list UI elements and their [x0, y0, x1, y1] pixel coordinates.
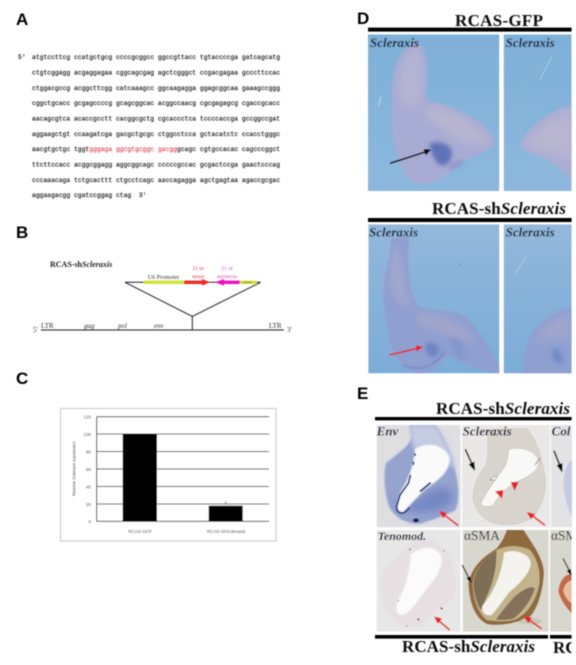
genome labels: 3': [287, 326, 292, 334]
photo label: Scleraxis: [463, 424, 512, 439]
arrow: black: [462, 565, 471, 583]
genome labels: LTR: [269, 322, 282, 330]
bottom heading RCAS-shScleraxis: RCAS-shScleraxis: [402, 637, 535, 656]
x axis labels: RCAS-GFP: [128, 529, 152, 534]
bottom rule: [375, 635, 572, 639]
sequence text: 5': [18, 54, 26, 61]
vector backbone and insert lines: [41, 282, 284, 330]
panel D: RCAS-shScleraxis whole mounts: [368, 199, 572, 373]
U6 promoter segment: [144, 281, 184, 284]
panel D: RCAS-GFP whole mounts: [357, 9, 572, 191]
photo: Scleraxis contralateral limb: [504, 34, 572, 191]
arrowhead: black: [424, 149, 431, 155]
y axis tick labels: 120: [83, 415, 91, 420]
rule: [375, 417, 572, 420]
section: Scleraxis: [462, 425, 550, 527]
panel letter C: C: [16, 369, 28, 388]
chart frame: [60, 408, 276, 541]
sequence text: atgtccttcg ccatgctgcg ccccgcggcc ggccgttacc tgtaccccga gatcagcatg: [32, 54, 280, 61]
panel E: sections: [357, 384, 576, 657]
photo label: Env: [376, 423, 399, 438]
section: alphaSMA: [463, 529, 549, 632]
y axis tick labels: 20: [86, 502, 91, 507]
photo label: Scleraxis: [370, 35, 419, 50]
genome labels: 5': [33, 326, 38, 334]
label: 21 nt sense: sense: [192, 274, 205, 280]
photo label: αSMA: [464, 528, 500, 543]
arrow: red: [389, 349, 417, 355]
terminator segment: [240, 281, 256, 284]
y axis tick labels: 60: [86, 467, 91, 472]
sequence text: aggaagctgt ccaagatcga gacgctgcgc ctggcctcca gctacatctc ccacctgggc: [32, 131, 280, 138]
arrow: 21 nt sense: [184, 279, 210, 286]
arrow: black: [465, 449, 475, 471]
genome labels: gag: [84, 322, 95, 330]
photo: Scleraxis limb with control stain: [368, 34, 499, 191]
arrow: 21 nt antisense: [215, 279, 240, 286]
y axis tick labels: 40: [86, 484, 91, 489]
rule: [368, 28, 572, 32]
construct title: RCAS-shScleraxis: [50, 260, 112, 269]
panel letter E: E: [357, 384, 368, 403]
section: Tenomod: [377, 530, 461, 632]
arrow: black: [390, 152, 425, 163]
genome labels: pol: [117, 322, 127, 330]
y axis tick labels: 100: [83, 432, 91, 437]
label: 21 nt antisense: 21 nt: [221, 266, 233, 272]
section: alphaSMA partial: [550, 530, 572, 632]
sequence text: aacagcgtca acaccgcctt cacggcgctg cgcaccctca tccccaccga gccggccgat: [32, 115, 280, 122]
arrow: black: [554, 451, 562, 473]
heading RCAS-GFP: RCAS-GFP: [455, 11, 543, 30]
y axis tick labels: 0: [88, 519, 91, 524]
panel letter A: A: [16, 10, 28, 29]
white right margin: [572, 0, 576, 665]
photo label: Tenomod.: [378, 529, 426, 543]
sequence text: aggaagacgg cgatccggag ctag 3': [32, 192, 146, 199]
section: Col partial: [551, 425, 572, 527]
genome labels: LTR: [41, 322, 54, 330]
sequence text: [18, 54, 280, 199]
sequence text: cccaaacaga tctgcacttt ctgcctcagc aaccagagga agctgagtaa agaccgcgac: [32, 177, 280, 184]
panel letter D: D: [357, 9, 369, 28]
arrow: red: [434, 616, 450, 630]
sequence text: ctggacgccg acggcttcgg catcaaagcc ggcaagagga ggagcggcaa gaaagccggg: [32, 85, 280, 92]
arrow: red: [527, 512, 545, 525]
arrowhead: red: [511, 482, 519, 491]
y axis tick labels: 80: [86, 450, 91, 454]
photo: Scleraxis limb with knockdown: [368, 224, 499, 373]
heading RCAS-shScleraxis: RCAS-shScleraxis: [436, 399, 570, 418]
x axis labels: [128, 529, 246, 534]
x axis labels: RCAS-ShScleraxis: [207, 529, 246, 534]
panel C: bar chart: [16, 369, 276, 541]
genome labels: env: [154, 322, 165, 330]
arrow: red: [439, 511, 458, 526]
photo: Scleraxis contralateral limb knockdown: [504, 224, 572, 373]
photo label: Scleraxis: [506, 35, 555, 50]
y axis tick labels: [83, 415, 91, 524]
sequence text: ctgtcggagg acgaggagaa cggcagcgag agctcgggct ccgacgagaa gcccttccac: [32, 69, 280, 76]
bar: RCAS-ShScleraxis: [209, 502, 243, 521]
heading RCAS-shScleraxis: RCAS-shScleraxis: [432, 199, 566, 218]
sequence text: aacgtgctgc tggtgggaga ggcgtgcggc gacgggcagc cgtgccacac cagcccggct: [32, 146, 280, 153]
arrow: black: [563, 558, 572, 576]
sequence text: cggctgcacc gcgagccccg gcagcggcac acggccaacg cgcgagagcg cgaccgcacc: [32, 100, 280, 107]
sequence text: ttcttccacc acggcggagg aggcggcagc cccccgccac gcgactccga gaactcccag: [32, 161, 280, 168]
genome labels: [33, 322, 292, 334]
photo label: Scleraxis: [506, 225, 555, 240]
panel letter B: B: [16, 223, 28, 242]
rule: [368, 218, 572, 222]
photo label: Scleraxis: [369, 225, 418, 240]
arrowhead: red: [416, 345, 423, 352]
y axis title: Relative Scleraxis expression: [72, 441, 76, 496]
section: Env: [377, 425, 461, 527]
U6 promoter label: U6 Promoter: [148, 275, 179, 281]
photo label: Col: [552, 424, 571, 439]
bar: RCAS-GFP: [123, 434, 157, 521]
arrowhead: red: [495, 490, 503, 499]
label: 21 nt antisense: antisense: [217, 274, 238, 280]
panel A: nucleotide sequence: [16, 10, 280, 199]
arrow: red: [524, 616, 542, 629]
panel B: vector diagram: [16, 223, 292, 334]
label: 21 nt sense: 21 nt: [192, 266, 204, 272]
gridlines and axes: [97, 417, 269, 521]
